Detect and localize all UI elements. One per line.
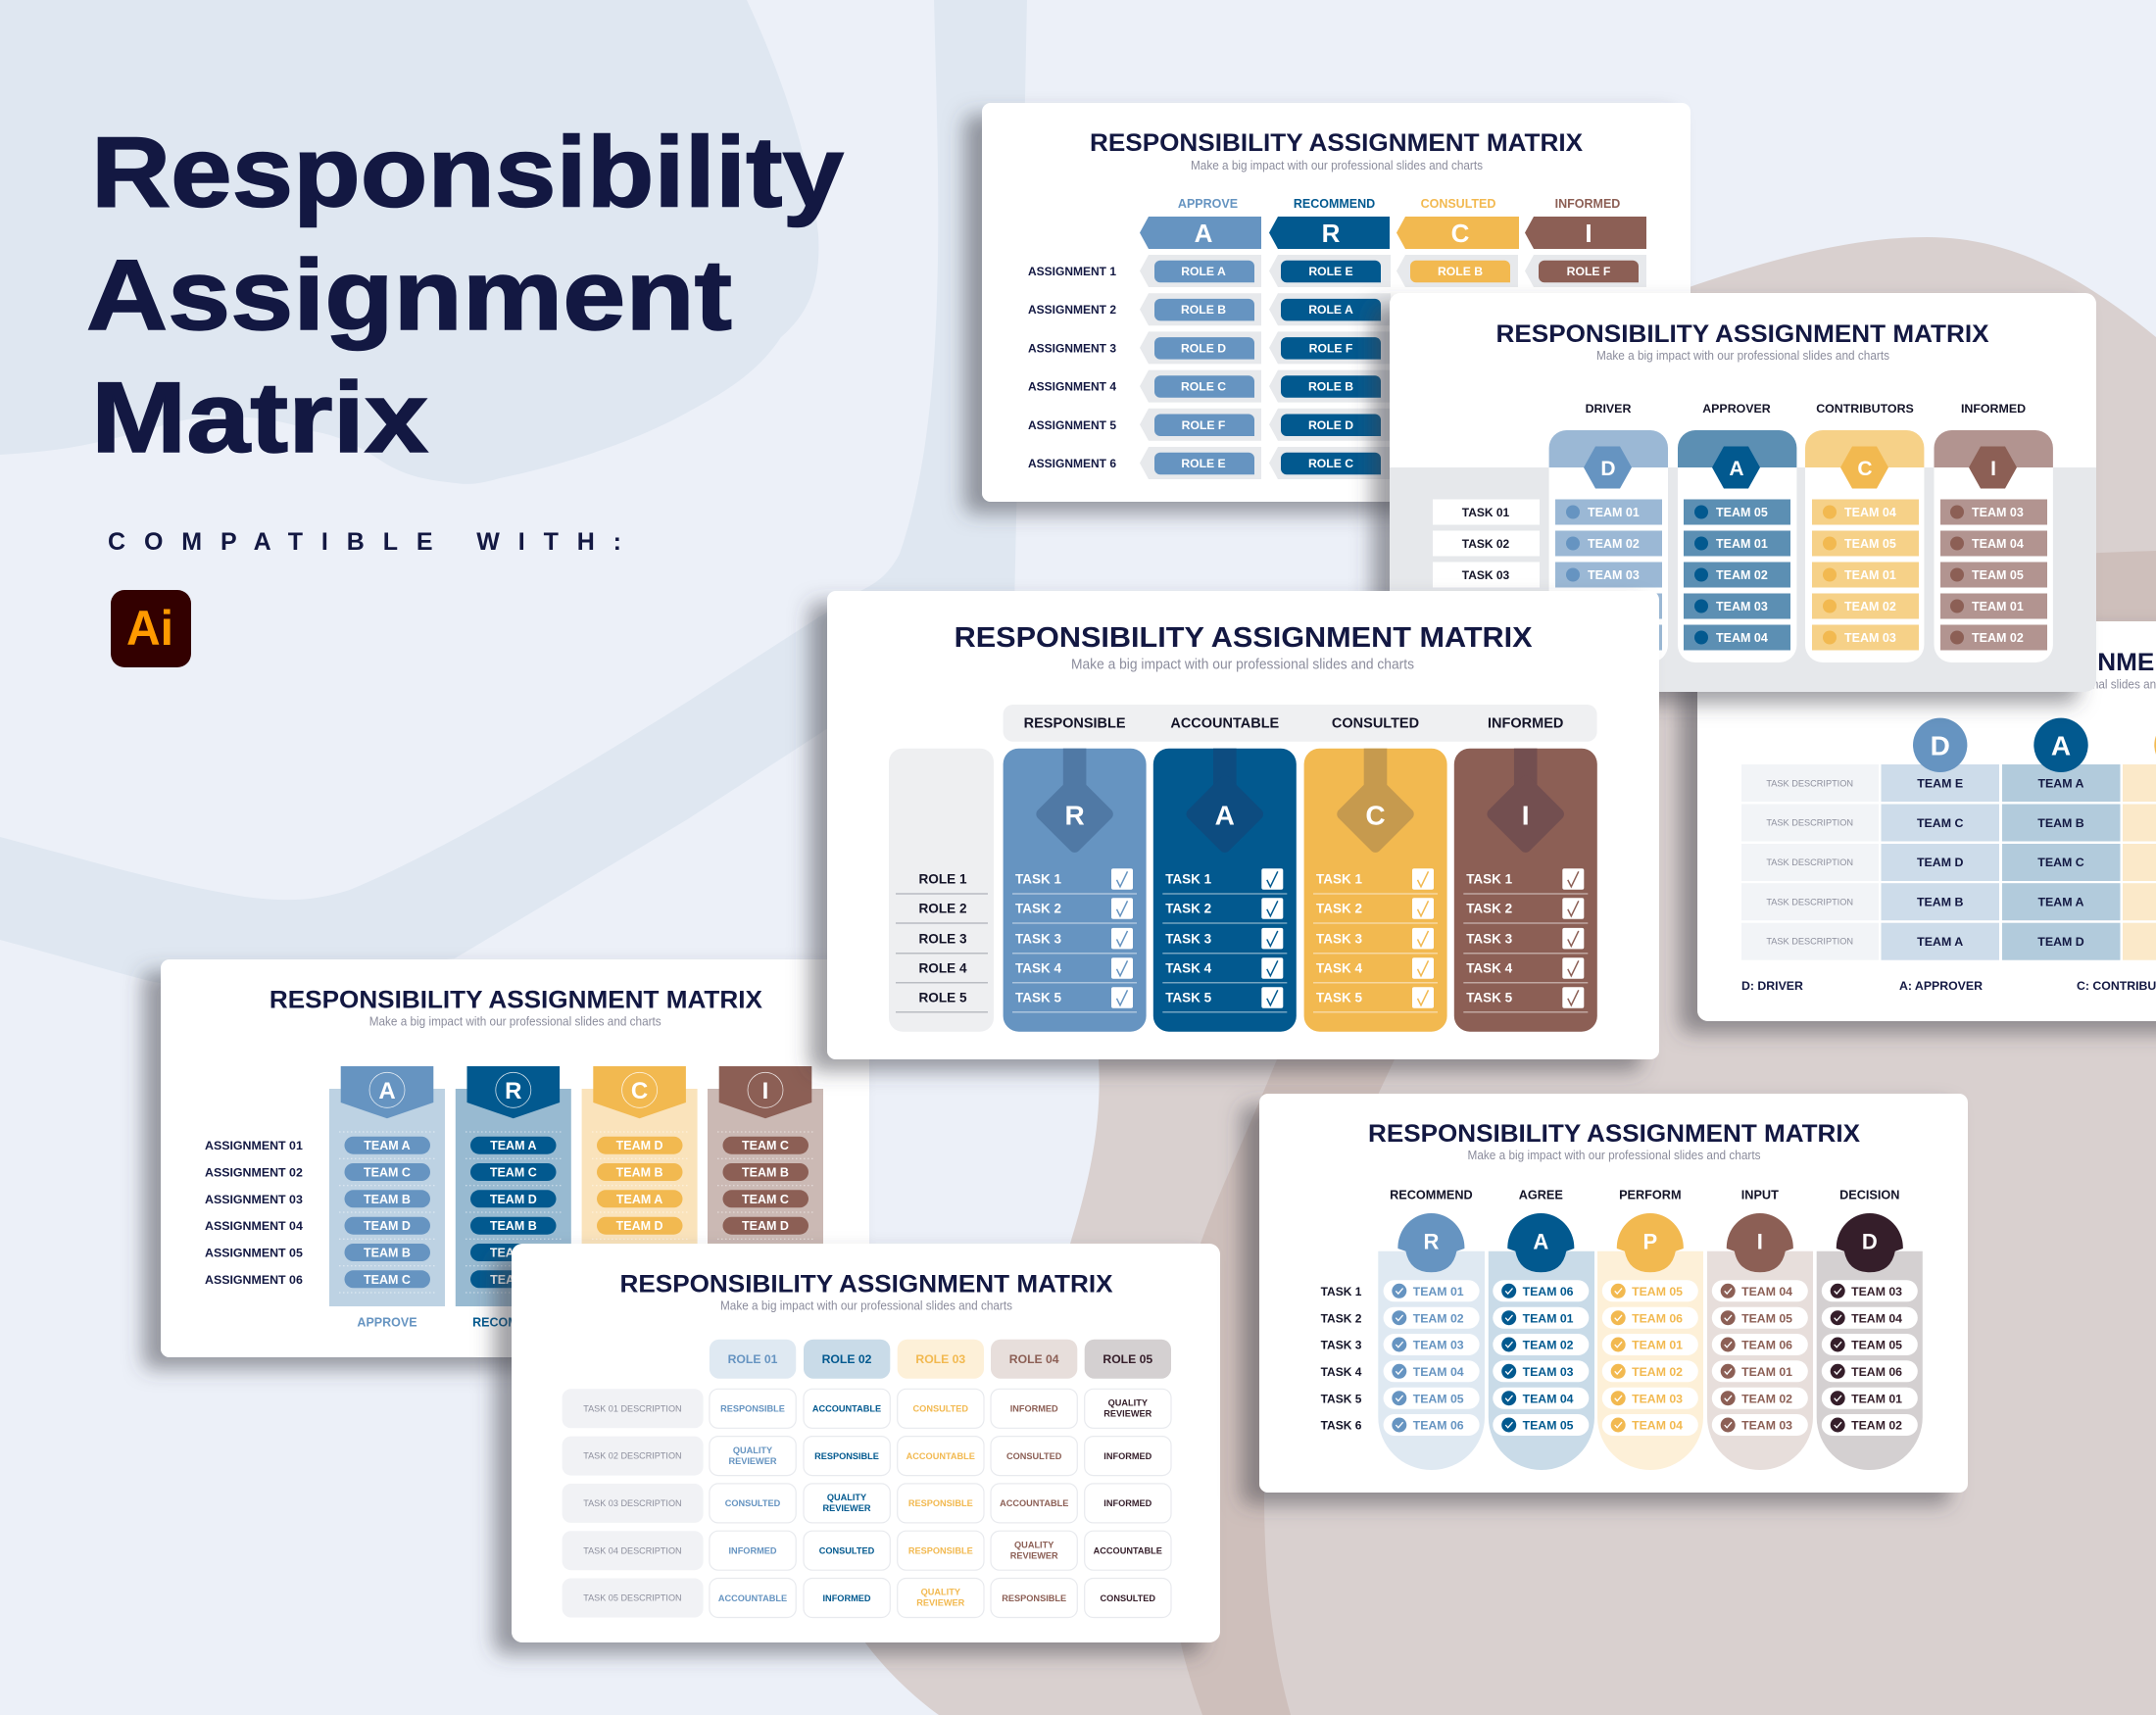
assignment labels: ASSIGNMENT 02 — [205, 1166, 303, 1180]
team names: TEAM A — [2037, 776, 2084, 790]
team labels: TEAM 01 — [1741, 1365, 1792, 1379]
assignment labels: ASSIGNMENT 06 — [205, 1273, 303, 1287]
column headers — [1586, 402, 2026, 416]
grid labels: REVIEWER — [916, 1598, 965, 1608]
team pills: TEAM D — [616, 1219, 663, 1233]
grid labels: INFORMED — [823, 1593, 871, 1603]
team bars: TEAM 04 — [1972, 537, 2024, 551]
column: accountable: TASK 5 — [1165, 991, 1212, 1005]
team labels: TEAM 06 — [1851, 1365, 1902, 1379]
hexagon badges: C — [1857, 458, 1873, 480]
team pills: TEAM C — [364, 1273, 411, 1287]
grid cells — [710, 1389, 1171, 1617]
column headers: DECISION — [1839, 1188, 1899, 1201]
head badges: A — [1533, 1229, 1548, 1253]
team labels: TEAM 02 — [1632, 1365, 1683, 1379]
task labels: TASK 6 — [1321, 1419, 1362, 1433]
grid labels: REVIEWER — [1103, 1409, 1152, 1419]
team pills: TEAM B — [364, 1193, 411, 1206]
team labels: TEAM 01 — [1413, 1285, 1464, 1298]
task descriptions: TASK DESCRIPTION — [1766, 898, 1853, 907]
grid labels: INFORMED — [1103, 1451, 1152, 1461]
card title: RESPONSIBILITY ASSIGNMENT MATRIX — [270, 986, 762, 1013]
role chips: ROLE C — [1308, 457, 1353, 470]
team pills: TEAM B — [742, 1166, 789, 1180]
assignment labels: ASSIGNMENT 3 — [1028, 341, 1116, 355]
team labels: TEAM 04 — [1632, 1419, 1683, 1433]
grid labels: RESPONSIBLE — [908, 1546, 973, 1556]
team bars: TEAM 04 — [1716, 631, 1768, 645]
role headers: ROLE 05 — [1102, 1352, 1152, 1366]
banner tabs: A — [378, 1078, 396, 1104]
role chips: ROLE F — [1182, 418, 1225, 432]
team names: TEAM B — [1917, 896, 1963, 909]
team bars: TEAM 02 — [1972, 631, 2024, 645]
team labels: TEAM 01 — [1632, 1339, 1683, 1352]
card title: RESPONSIBILITY ASSIGNMENT MATRIX — [1495, 320, 1989, 348]
team bars: TEAM 01 — [1716, 537, 1768, 551]
legend: D: DRIVER — [1741, 979, 1803, 993]
card title: RESPONSIBILITY ASSIGNMENT MATRIX — [1368, 1120, 1860, 1148]
assignment labels — [1028, 265, 1116, 470]
grid labels: QUALITY — [827, 1493, 866, 1502]
grid labels — [718, 1397, 1162, 1608]
team labels: TEAM 03 — [1741, 1419, 1792, 1433]
column headers — [1178, 197, 1620, 211]
team bars: TEAM 05 — [1588, 631, 1640, 645]
role chips: ROLE B — [1308, 380, 1353, 394]
column headers: CONTRIBUTORS — [1816, 402, 1914, 416]
column headers: RECOMMEND — [1294, 197, 1375, 211]
team labels: TEAM 05 — [1851, 1339, 1902, 1352]
column: accountable: TASK 1 — [1165, 872, 1212, 887]
task description cells: TASK 03 DESCRIPTION — [583, 1498, 682, 1508]
team pills: TEAM B — [490, 1219, 537, 1233]
main title: Matrix — [91, 362, 428, 473]
main title: Responsibility — [91, 116, 844, 227]
team bars: TEAM 02 — [1716, 568, 1768, 582]
grey band — [1390, 467, 2096, 692]
header bar: RESPONSIBLE — [1024, 716, 1126, 732]
team names: TEAM A — [1917, 935, 1963, 949]
grid labels: RESPONSIBLE — [814, 1451, 879, 1461]
card title: RESPONSIBILITY ASSIGNMENT MATRIX — [1090, 129, 1583, 157]
role chips: ROLE D — [1308, 418, 1353, 432]
arrow headers: R — [1322, 219, 1341, 248]
legend: A: APPROVER — [1899, 979, 1983, 993]
assignment labels: ASSIGNMENT 01 — [205, 1139, 303, 1152]
team labels: TEAM 03 — [1413, 1339, 1464, 1352]
column panels — [329, 1089, 823, 1306]
team bars: TEAM 05 — [1716, 506, 1768, 519]
task labels: TASK 02 — [1462, 537, 1510, 551]
column panels — [1378, 1251, 1923, 1470]
table cells — [1741, 764, 2156, 960]
team labels: TEAM 05 — [1741, 1311, 1792, 1325]
column headers — [1390, 1188, 1899, 1201]
hexagon badges: I — [1990, 458, 1996, 480]
card subtitle: Make a big impact with our professional slides and charts — [1071, 657, 1414, 672]
legend — [1741, 979, 2156, 993]
card subtitle: Make a big impact with our professional slides and charts — [1596, 349, 1889, 363]
role chips: ROLE D — [1181, 341, 1226, 355]
column: accountable — [1153, 749, 1297, 1032]
hexagon badges — [1584, 447, 2017, 488]
team names: TEAM D — [2037, 935, 2084, 949]
grid labels: RESPONSIBLE — [1002, 1593, 1066, 1603]
column: responsible: TASK 2 — [1015, 902, 1061, 916]
task descriptions: TASK DESCRIPTION — [1766, 858, 1853, 867]
team pills: TEAM B — [616, 1166, 663, 1180]
grid labels: RESPONSIBLE — [720, 1404, 785, 1414]
grid labels: INFORMED — [729, 1546, 777, 1556]
grid labels: INFORMED — [1103, 1498, 1152, 1508]
column: accountable: TASK 4 — [1165, 961, 1212, 976]
grid labels: REVIEWER — [822, 1503, 871, 1513]
team pills: TEAM C — [742, 1193, 789, 1206]
bottom column labels: APPROVE — [357, 1315, 417, 1329]
team labels: TEAM 01 — [1851, 1392, 1902, 1405]
assignment labels: ASSIGNMENT 6 — [1028, 457, 1116, 470]
role chips — [1154, 261, 1639, 474]
column headers: CONSULTED — [1421, 197, 1495, 211]
team pills: TEAM B — [490, 1247, 537, 1260]
column: responsible: TASK 1 — [1015, 872, 1061, 887]
column circles: D — [1931, 731, 1950, 760]
card: A R C I banner columns — [161, 959, 869, 1357]
grid labels: RESPONSIBLE — [908, 1498, 973, 1508]
task description cells: TASK 04 DESCRIPTION — [583, 1545, 682, 1555]
role chips: ROLE F — [1567, 265, 1610, 278]
team bars: TEAM 01 — [1844, 568, 1896, 582]
column: consulted: TASK 1 — [1316, 872, 1362, 887]
column headers: INFORMED — [1961, 402, 2026, 416]
column panels — [1549, 430, 2053, 662]
team labels: TEAM 06 — [1741, 1339, 1792, 1352]
team bars: TEAM 04 — [1588, 600, 1640, 613]
team pills: TEAM D — [742, 1219, 789, 1233]
team names: TEAM D — [1917, 856, 1963, 869]
check icons — [1392, 1284, 1845, 1433]
column: informed: TASK 5 — [1466, 991, 1513, 1005]
task description cells: TASK 01 DESCRIPTION — [583, 1403, 682, 1413]
role chips: ROLE A — [1308, 303, 1353, 317]
card: D A C I hexagon matrix — [1390, 293, 2096, 692]
task labels: TASK 03 — [1462, 568, 1510, 582]
task labels: TASK 2 — [1321, 1311, 1362, 1325]
grid labels: ACCOUNTABLE — [812, 1404, 881, 1414]
column: informed — [1454, 749, 1597, 1032]
column headers: DRIVER — [1586, 402, 1631, 416]
banner tabs — [341, 1066, 811, 1118]
team names: TEAM B — [2037, 816, 2084, 830]
background patch: dark brown right — [2058, 551, 2156, 784]
team bars: TEAM 05 — [1844, 537, 1896, 551]
task description cells — [563, 1389, 704, 1617]
header bar: CONSULTED — [1332, 716, 1419, 732]
team names: TEAM C — [2037, 856, 2084, 869]
head badges: P — [1642, 1229, 1657, 1253]
role column: ROLE 1 — [918, 872, 967, 887]
role headers: ROLE 02 — [822, 1352, 872, 1366]
card subtitle: Make a big impact with our professional slides and charts — [1191, 159, 1483, 172]
team bars — [1555, 500, 2047, 651]
role column: ROLE 4 — [918, 961, 967, 976]
column circles: A — [2051, 731, 2071, 760]
role headers: ROLE 03 — [915, 1352, 965, 1366]
grid labels: CONSULTED — [1101, 1593, 1155, 1603]
white pills — [1384, 1280, 1918, 1436]
team pills: TEAM A — [364, 1139, 411, 1152]
grid labels: REVIEWER — [1010, 1550, 1058, 1560]
role chips: ROLE B — [1181, 303, 1226, 317]
task labels: TASK 4 — [1321, 1365, 1362, 1379]
head badges — [1397, 1213, 1903, 1272]
grid labels: ACCOUNTABLE — [1000, 1498, 1068, 1508]
team pills: TEAM A — [490, 1273, 537, 1287]
column: informed: TASK 1 — [1466, 872, 1513, 887]
task labels — [1321, 1285, 1362, 1433]
column: accountable: TASK 2 — [1165, 902, 1211, 916]
compatible with label: COMPATIBLE WITH: — [108, 528, 621, 556]
team labels: TEAM 04 — [1741, 1285, 1792, 1298]
column: informed: TASK 4 — [1466, 961, 1513, 976]
main title: Assignment — [86, 239, 732, 351]
head badges: R — [1423, 1229, 1439, 1253]
task labels — [1433, 500, 1540, 588]
arrow headers — [1140, 217, 1646, 249]
team labels: TEAM 06 — [1632, 1311, 1683, 1325]
grid labels: CONSULTED — [819, 1546, 875, 1556]
grid labels: CONSULTED — [725, 1498, 781, 1508]
grid labels: INFORMED — [1010, 1404, 1058, 1414]
team names — [1917, 776, 2084, 949]
header bar: INFORMED — [1488, 716, 1563, 732]
column: informed: TASK 3 — [1466, 931, 1513, 946]
header bar: ACCOUNTABLE — [1170, 716, 1280, 732]
column: responsible: TASK 4 — [1015, 961, 1061, 976]
team pills: TEAM C — [364, 1166, 411, 1180]
banner tabs: R — [505, 1078, 521, 1104]
column headers: APPROVER — [1702, 402, 1771, 416]
team names: TEAM A — [2037, 896, 2084, 909]
team pills: TEAM D — [616, 1139, 663, 1152]
column: consulted: TASK 3 — [1316, 931, 1362, 946]
team labels — [1413, 1285, 1902, 1433]
role chips: ROLE F — [1309, 341, 1352, 355]
grid labels: ACCOUNTABLE — [718, 1593, 787, 1603]
column headers: RECOMMEND — [1390, 1188, 1473, 1201]
task descriptions — [1766, 778, 1853, 947]
head badges: D — [1862, 1229, 1878, 1253]
main title — [86, 116, 844, 473]
card: D A C I table (cropped right) — [1697, 621, 2156, 1021]
assignment labels: ASSIGNMENT 4 — [1028, 380, 1116, 394]
row backings — [1140, 255, 1646, 479]
card: R A C I diamond columns (centre) — [827, 591, 1659, 1059]
column headers: APPROVE — [1178, 197, 1238, 211]
team labels: TEAM 03 — [1851, 1285, 1902, 1298]
column: consulted: TASK 4 — [1316, 961, 1362, 976]
column: responsible: TASK 5 — [1015, 991, 1061, 1005]
assignment labels: ASSIGNMENT 04 — [205, 1219, 303, 1233]
column circles — [1913, 718, 2156, 772]
bottom column labels: RECOMMEND — [472, 1315, 554, 1329]
team bars: TEAM 02 — [1844, 600, 1896, 613]
team bars: TEAM 04 — [1844, 506, 1896, 519]
role column — [889, 749, 994, 1032]
assignment labels: ASSIGNMENT 1 — [1028, 265, 1116, 278]
assignment labels: ASSIGNMENT 05 — [205, 1247, 303, 1260]
task descriptions: TASK DESCRIPTION — [1766, 937, 1853, 947]
role chips: ROLE A — [1181, 265, 1226, 278]
team labels: TEAM 05 — [1413, 1392, 1464, 1405]
banner tabs: C — [631, 1078, 648, 1104]
column: consulted: TASK 2 — [1316, 902, 1362, 916]
team pills: TEAM B — [364, 1247, 411, 1260]
task labels: TASK 3 — [1321, 1339, 1362, 1352]
team labels: TEAM 02 — [1741, 1392, 1792, 1405]
team labels: TEAM 02 — [1413, 1311, 1464, 1325]
column headers: INFORMED — [1555, 197, 1620, 211]
team labels: TEAM 04 — [1523, 1392, 1574, 1405]
hexagon badges: D — [1600, 458, 1616, 480]
arrow headers: C — [1451, 219, 1470, 248]
task labels: TASK 1 — [1321, 1285, 1362, 1298]
bottom column labels — [357, 1315, 554, 1329]
assignment labels: ASSIGNMENT 2 — [1028, 303, 1116, 317]
team bars: TEAM 03 — [1588, 568, 1640, 582]
task description cells: TASK 05 DESCRIPTION — [583, 1593, 682, 1603]
column headers: PERFORM — [1619, 1188, 1682, 1201]
column headers: INPUT — [1741, 1188, 1779, 1201]
team pills: TEAM D — [490, 1193, 537, 1206]
team names: TEAM E — [1917, 776, 1963, 790]
card subtitle: Make a big impact with our professional slides and charts — [369, 1015, 662, 1029]
role headers: ROLE 01 — [728, 1352, 778, 1366]
role column: ROLE 5 — [918, 991, 967, 1005]
team bars: TEAM 01 — [1972, 600, 2024, 613]
grid labels: QUALITY — [1014, 1540, 1054, 1549]
column: informed: I — [1522, 801, 1530, 831]
team labels: TEAM 03 — [1632, 1392, 1683, 1405]
task description cells: TASK 02 DESCRIPTION — [583, 1451, 682, 1461]
card title: RESPONSIBILITY ASSIGNMENT MATRIX — [955, 622, 1533, 654]
team bars: TEAM 05 — [1972, 568, 2024, 582]
team bars: TEAM 03 — [1972, 506, 2024, 519]
background strip: dark brown — [1181, 1059, 1395, 1715]
team names: TEAM C — [1917, 816, 1963, 830]
background blob: brown — [864, 237, 2156, 1715]
grid labels: QUALITY — [1108, 1397, 1148, 1407]
icon: Adobe Illustrator — [111, 590, 191, 667]
team bars: TEAM 01 — [1588, 506, 1640, 519]
arrow headers: I — [1585, 219, 1592, 248]
role chips: ROLE E — [1308, 265, 1353, 278]
column: informed: TASK 2 — [1466, 902, 1512, 916]
role chips: ROLE E — [1181, 457, 1226, 470]
task labels: TASK 01 — [1462, 506, 1510, 519]
column: consulted — [1304, 749, 1447, 1032]
team labels: TEAM 04 — [1851, 1311, 1902, 1325]
role headers — [710, 1340, 1171, 1379]
team bars: TEAM 03 — [1716, 600, 1768, 613]
arrow headers: A — [1195, 219, 1213, 248]
role chips: ROLE C — [1181, 380, 1226, 394]
team pills: TEAM A — [616, 1193, 662, 1206]
card: R A P I D columns — [1259, 1094, 1968, 1493]
header bar — [1004, 705, 1597, 742]
grid labels: QUALITY — [921, 1588, 960, 1597]
column: consulted: TASK 5 — [1316, 991, 1362, 1005]
assignment labels: ASSIGNMENT 03 — [205, 1193, 303, 1206]
grid labels: QUALITY — [733, 1446, 772, 1455]
team pills: TEAM D — [364, 1219, 411, 1233]
team labels: TEAM 02 — [1851, 1419, 1902, 1433]
team labels: TEAM 02 — [1523, 1339, 1574, 1352]
team labels: TEAM 03 — [1523, 1365, 1574, 1379]
assignment labels — [205, 1139, 303, 1287]
team labels: TEAM 06 — [1523, 1285, 1574, 1298]
team bars: TEAM 03 — [1844, 631, 1896, 645]
card subtitle: Make a big impact with our professional slides and charts — [720, 1299, 1012, 1313]
grid labels: ACCOUNTABLE — [1094, 1546, 1162, 1556]
team pills: TEAM C — [742, 1139, 789, 1152]
card: A R C I arrow matrix — [982, 103, 1690, 502]
card: role task grid — [512, 1244, 1220, 1642]
team pills: TEAM C — [490, 1166, 537, 1180]
column: consulted: C — [1365, 801, 1386, 831]
grid labels: REVIEWER — [728, 1456, 777, 1466]
column: accountable: A — [1215, 801, 1235, 831]
team labels: TEAM 04 — [1413, 1365, 1464, 1379]
background band — [0, 0, 1027, 990]
team bars: TEAM 02 — [1588, 537, 1640, 551]
grid labels: CONSULTED — [913, 1404, 968, 1414]
role column: ROLE 3 — [918, 931, 967, 946]
card title: RESPONSIBILITY ASSIGNMENT MATRIX — [619, 1270, 1113, 1298]
grid labels: CONSULTED — [1006, 1451, 1062, 1461]
grid labels: ACCOUNTABLE — [906, 1451, 975, 1461]
role column: ROLE 2 — [918, 902, 967, 916]
team labels: TEAM 05 — [1523, 1419, 1574, 1433]
dotted row lines — [339, 1132, 813, 1293]
column: accountable: TASK 3 — [1165, 931, 1212, 946]
team labels: TEAM 01 — [1523, 1311, 1574, 1325]
column: responsible — [1004, 749, 1147, 1032]
banner tabs: I — [762, 1078, 768, 1104]
card subtitle: Make a big impact with our professional slides and charts — [1468, 1149, 1760, 1162]
head badges: I — [1757, 1229, 1763, 1253]
team labels: TEAM 06 — [1413, 1419, 1464, 1433]
task descriptions: TASK DESCRIPTION — [1766, 818, 1853, 828]
team pills: TEAM A — [490, 1139, 537, 1152]
column headers: AGREE — [1519, 1188, 1563, 1201]
team pills — [345, 1137, 808, 1288]
column: responsible: R — [1064, 801, 1085, 831]
task descriptions: TASK DESCRIPTION — [1766, 778, 1853, 788]
hexagon badges: A — [1729, 458, 1744, 480]
task labels: TASK 5 — [1321, 1392, 1362, 1405]
column: responsible: TASK 3 — [1015, 931, 1061, 946]
background blob: top left — [0, 0, 818, 484]
icon: Adobe Illustrator: Ai — [126, 601, 173, 656]
role headers: ROLE 04 — [1009, 1352, 1059, 1366]
assignment labels: ASSIGNMENT 5 — [1028, 418, 1116, 432]
team labels: TEAM 05 — [1632, 1285, 1683, 1298]
role chips: ROLE B — [1438, 265, 1483, 278]
